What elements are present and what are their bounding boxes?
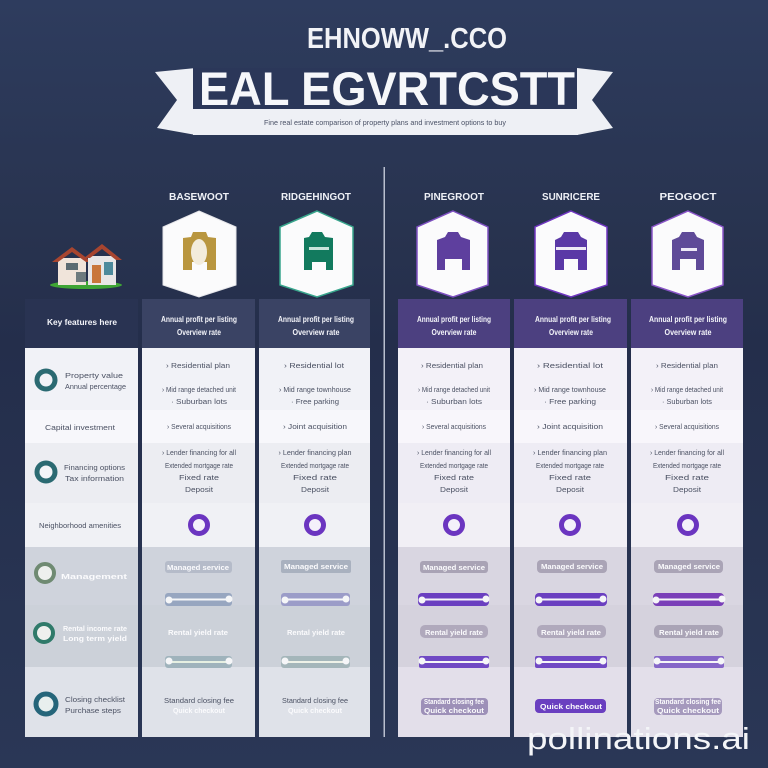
column titles [169, 191, 717, 203]
panel: column five: Fixed rate [665, 473, 709, 482]
panel: feature labels: Closing checklist [65, 695, 126, 704]
panel: column three: › Residential plan [421, 361, 483, 370]
panel: feature labels [25, 299, 138, 737]
panel: column two: Annual profit per listing [278, 315, 354, 324]
panel: feature labels: Capital investment [45, 423, 116, 432]
panel: column three: Annual profit per listing [417, 315, 491, 324]
panel: feature labels: Long term yield [63, 634, 127, 643]
panel: column one: › Lender financing for all [162, 448, 236, 457]
panel: column five: · Suburban lots [662, 397, 712, 406]
icon: house illustration [50, 244, 122, 289]
panel: column four: Extended mortgage rate [536, 461, 604, 470]
panel: column four: Deposit [556, 485, 585, 494]
center divider [384, 167, 385, 737]
panel: column one: Managed service [167, 563, 229, 572]
panel: column two: · Free parking [291, 397, 339, 406]
panel: feature labels: Property value [65, 371, 123, 380]
watermark: pollinations.ai [527, 721, 750, 756]
panel: column two: Extended mortgage rate [281, 461, 349, 470]
panel: column five: Extended mortgage rate [653, 461, 721, 470]
panel: column two: › Joint acquisition [283, 422, 347, 431]
panel: column four: Quick checkout [540, 702, 603, 711]
panel: column two: Managed service [284, 562, 348, 571]
hexagon icon: purple two [535, 211, 607, 297]
column titles: PINEGROOT [424, 191, 485, 203]
hexagon icon: purple one [417, 211, 488, 297]
panel: feature labels: Financing options [64, 463, 125, 472]
panel: column three: Quick checkout [424, 706, 485, 715]
panel: column five: Managed service [658, 562, 720, 571]
panel: column five: › Several acquisitions [655, 422, 719, 431]
panel: column five: Rental yield rate [659, 628, 719, 637]
panel: column two: Deposit [301, 485, 330, 494]
panel: column three: › Mid range detached unit [418, 385, 491, 394]
panel: column two: › Mid range townhouse [279, 385, 351, 394]
panel: column three [398, 299, 510, 737]
panel: column one: Deposit [185, 485, 214, 494]
column titles: BASEWOOT [169, 191, 230, 203]
panel: column two: Quick checkout [288, 706, 342, 715]
panel: column five: Overview rate [664, 328, 712, 337]
title ribbon [155, 62, 613, 135]
panel: column three: › Lender financing for all [417, 448, 491, 457]
panel: column three: Deposit [440, 485, 469, 494]
panel: column one: › Mid range detached unit [162, 385, 237, 394]
panel: column five: Annual profit per listing [649, 315, 727, 324]
panel: column one: Extended mortgage rate [165, 461, 233, 470]
panel: feature labels: Neighborhood amenities [39, 521, 121, 530]
title ribbon: Fine real estate comparison of property plans and investment options to buy [264, 118, 506, 127]
panel: column four: Fixed rate [549, 473, 591, 482]
panel: column one: Annual profit per listing [161, 315, 237, 324]
panel: column two: Standard closing fee [282, 696, 348, 705]
panel: column four: › Joint acquisition [537, 422, 603, 431]
panel: column three: Standard closing fee [424, 697, 484, 706]
column titles: SUNRICERE [542, 191, 600, 203]
panel: feature labels: Management [61, 572, 128, 581]
panel: feature labels: Purchase steps [65, 706, 121, 715]
panel: column four [514, 299, 627, 737]
panel: column one: Standard closing fee [164, 696, 234, 705]
panel: column five [631, 299, 743, 737]
panel: column four: › Residential lot [537, 361, 604, 370]
hexagon icon: green [280, 211, 353, 297]
panel: column one [142, 299, 255, 737]
panel: column four: › Lender financing plan [533, 448, 607, 457]
panel: column five: Standard closing fee [655, 697, 721, 706]
panel: feature labels: Tax information [65, 474, 124, 483]
panel: column four: Overview rate [549, 328, 593, 337]
column titles: RIDGEHINGOT [281, 191, 352, 203]
panel: column four: Rental yield rate [541, 628, 601, 637]
panel: column five: Deposit [673, 485, 702, 494]
panel: feature labels: Annual percentage [65, 382, 126, 391]
panel: column two [259, 299, 370, 737]
panel: column one: Overview rate [177, 328, 221, 337]
hexagon icon: gold [163, 211, 236, 297]
panel: column one: Fixed rate [179, 473, 219, 482]
panel: column five: Quick checkout [657, 706, 720, 715]
panel: column four: · Free parking [544, 397, 596, 406]
panel: column five: › Lender financing for all [650, 448, 724, 457]
panel: column one: Rental yield rate [168, 628, 228, 637]
panel: feature labels: Rental income rate [63, 624, 127, 633]
panel: column three: · Suburban lots [426, 397, 482, 406]
panel: column one: › Residential plan [166, 361, 230, 370]
panel: column five: › Mid range detached unit [651, 385, 724, 394]
column titles: PEOGOCT [660, 191, 717, 203]
title ribbon: EAL EGVRTCSTT [199, 62, 575, 115]
panel: column three: Managed service [423, 563, 485, 572]
panel: column three: Rental yield rate [425, 628, 483, 637]
brand heading: EHNOWW_.CCO [307, 23, 507, 55]
panel: column three: Extended mortgage rate [420, 461, 488, 470]
panel: column two: Overview rate [292, 328, 340, 337]
panel: column five: › Residential plan [656, 361, 718, 370]
panel: column three: Fixed rate [434, 473, 474, 482]
panel: column one: › Several acquisitions [167, 422, 231, 431]
panel: column one: Quick checkout [173, 706, 225, 715]
panel: column four: Annual profit per listing [535, 315, 611, 324]
panel: column two: › Residential lot [284, 361, 345, 370]
panel: column two: › Lender financing plan [278, 448, 352, 457]
panel: column two: Fixed rate [293, 473, 337, 482]
panel: column two: Rental yield rate [287, 628, 345, 637]
panel: column three: Overview rate [432, 328, 477, 337]
panel: column three: › Several acquisitions [422, 422, 486, 431]
panel: feature labels: Key features here [47, 318, 118, 327]
hexagon icon: purple three [652, 211, 723, 297]
panel: column four: › Mid range townhouse [534, 385, 606, 394]
panel: column one: · Suburban lots [171, 397, 227, 406]
panel: column four: Managed service [541, 562, 603, 571]
